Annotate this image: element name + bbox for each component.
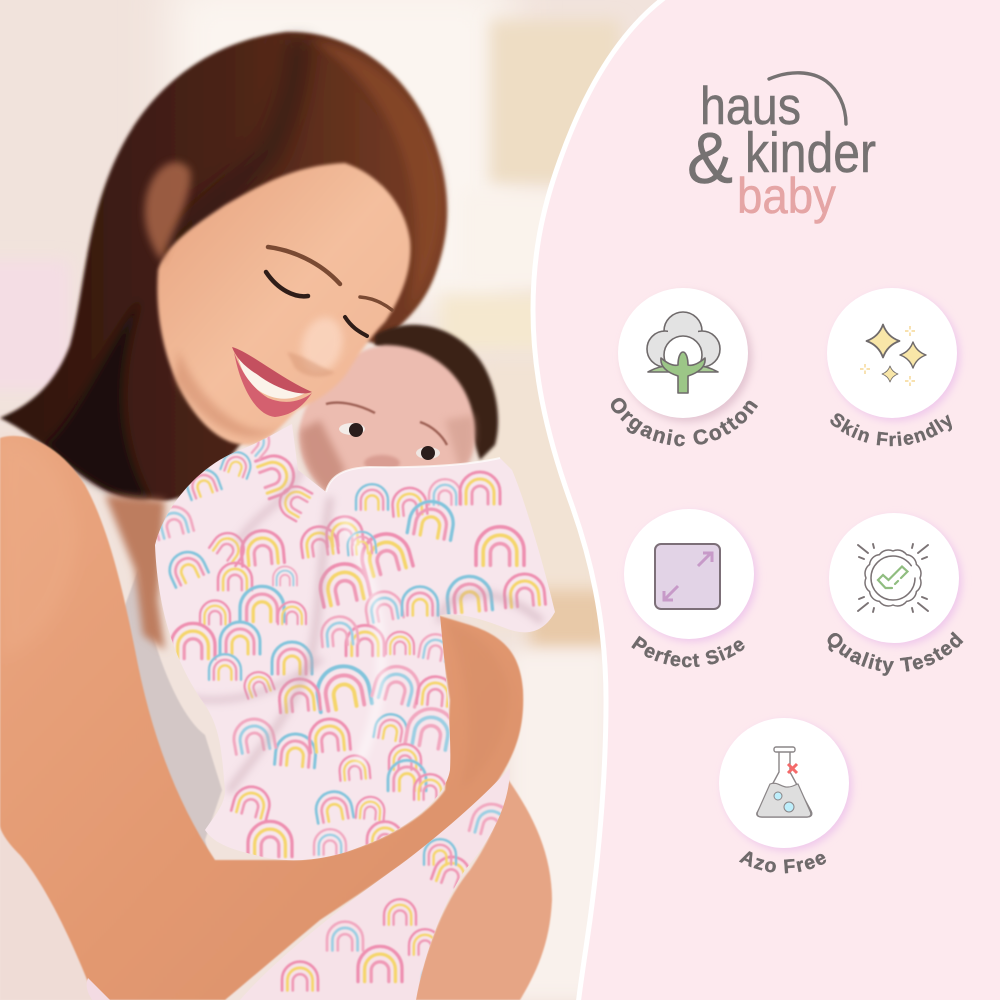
blanket folds	[160, 470, 540, 790]
mother's dress	[0, 570, 222, 1000]
baby's head	[299, 325, 498, 495]
feature: perfect size	[624, 509, 760, 668]
blanket sliver at elbow	[87, 978, 110, 1000]
feature: azo free	[719, 718, 854, 874]
mother's arms	[0, 436, 552, 1000]
label: perfect size: Perfect Size	[631, 636, 744, 668]
mother's face	[145, 162, 410, 445]
mother's hair	[0, 32, 447, 501]
icon: flask with cross	[757, 747, 812, 817]
logo: &	[687, 119, 733, 199]
label: quality tested: Quality Tested	[828, 631, 964, 676]
feature: skin friendly	[827, 288, 962, 446]
icon: quality seal	[858, 544, 928, 612]
mother's ear	[145, 162, 191, 262]
label: azo free: Azo Free	[738, 851, 826, 874]
mother's nose	[287, 313, 349, 377]
label: organic cotton: Organic Cotton	[610, 398, 758, 446]
logo	[687, 73, 876, 224]
logo: kinder	[745, 121, 876, 185]
mother's eyebrows and eyes	[266, 247, 392, 336]
feature: organic cotton	[610, 288, 758, 446]
rainbow muslin blanket: lower fold	[240, 774, 510, 1000]
logo: baby	[737, 168, 836, 224]
label: skin friendly: Skin Friendly	[830, 413, 952, 446]
icon: cotton boll	[647, 312, 720, 393]
photo background: blurred bedroom	[0, 0, 700, 1000]
mother's chest	[105, 495, 165, 650]
icon: resize square	[655, 544, 720, 609]
icon: sparkles	[860, 324, 926, 386]
rainbow muslin blanket: main wrap	[155, 424, 555, 860]
mother's smile	[232, 347, 312, 417]
photo: mother hugging baby wrapped in rainbow muslin	[0, 0, 700, 1000]
baby's eyes and nose	[339, 423, 365, 435]
logo: haus	[700, 77, 801, 136]
feature: quality tested	[828, 513, 964, 676]
right panel with curved white edge	[533, 0, 1000, 1000]
blanket top edge over baby's face	[326, 458, 500, 492]
